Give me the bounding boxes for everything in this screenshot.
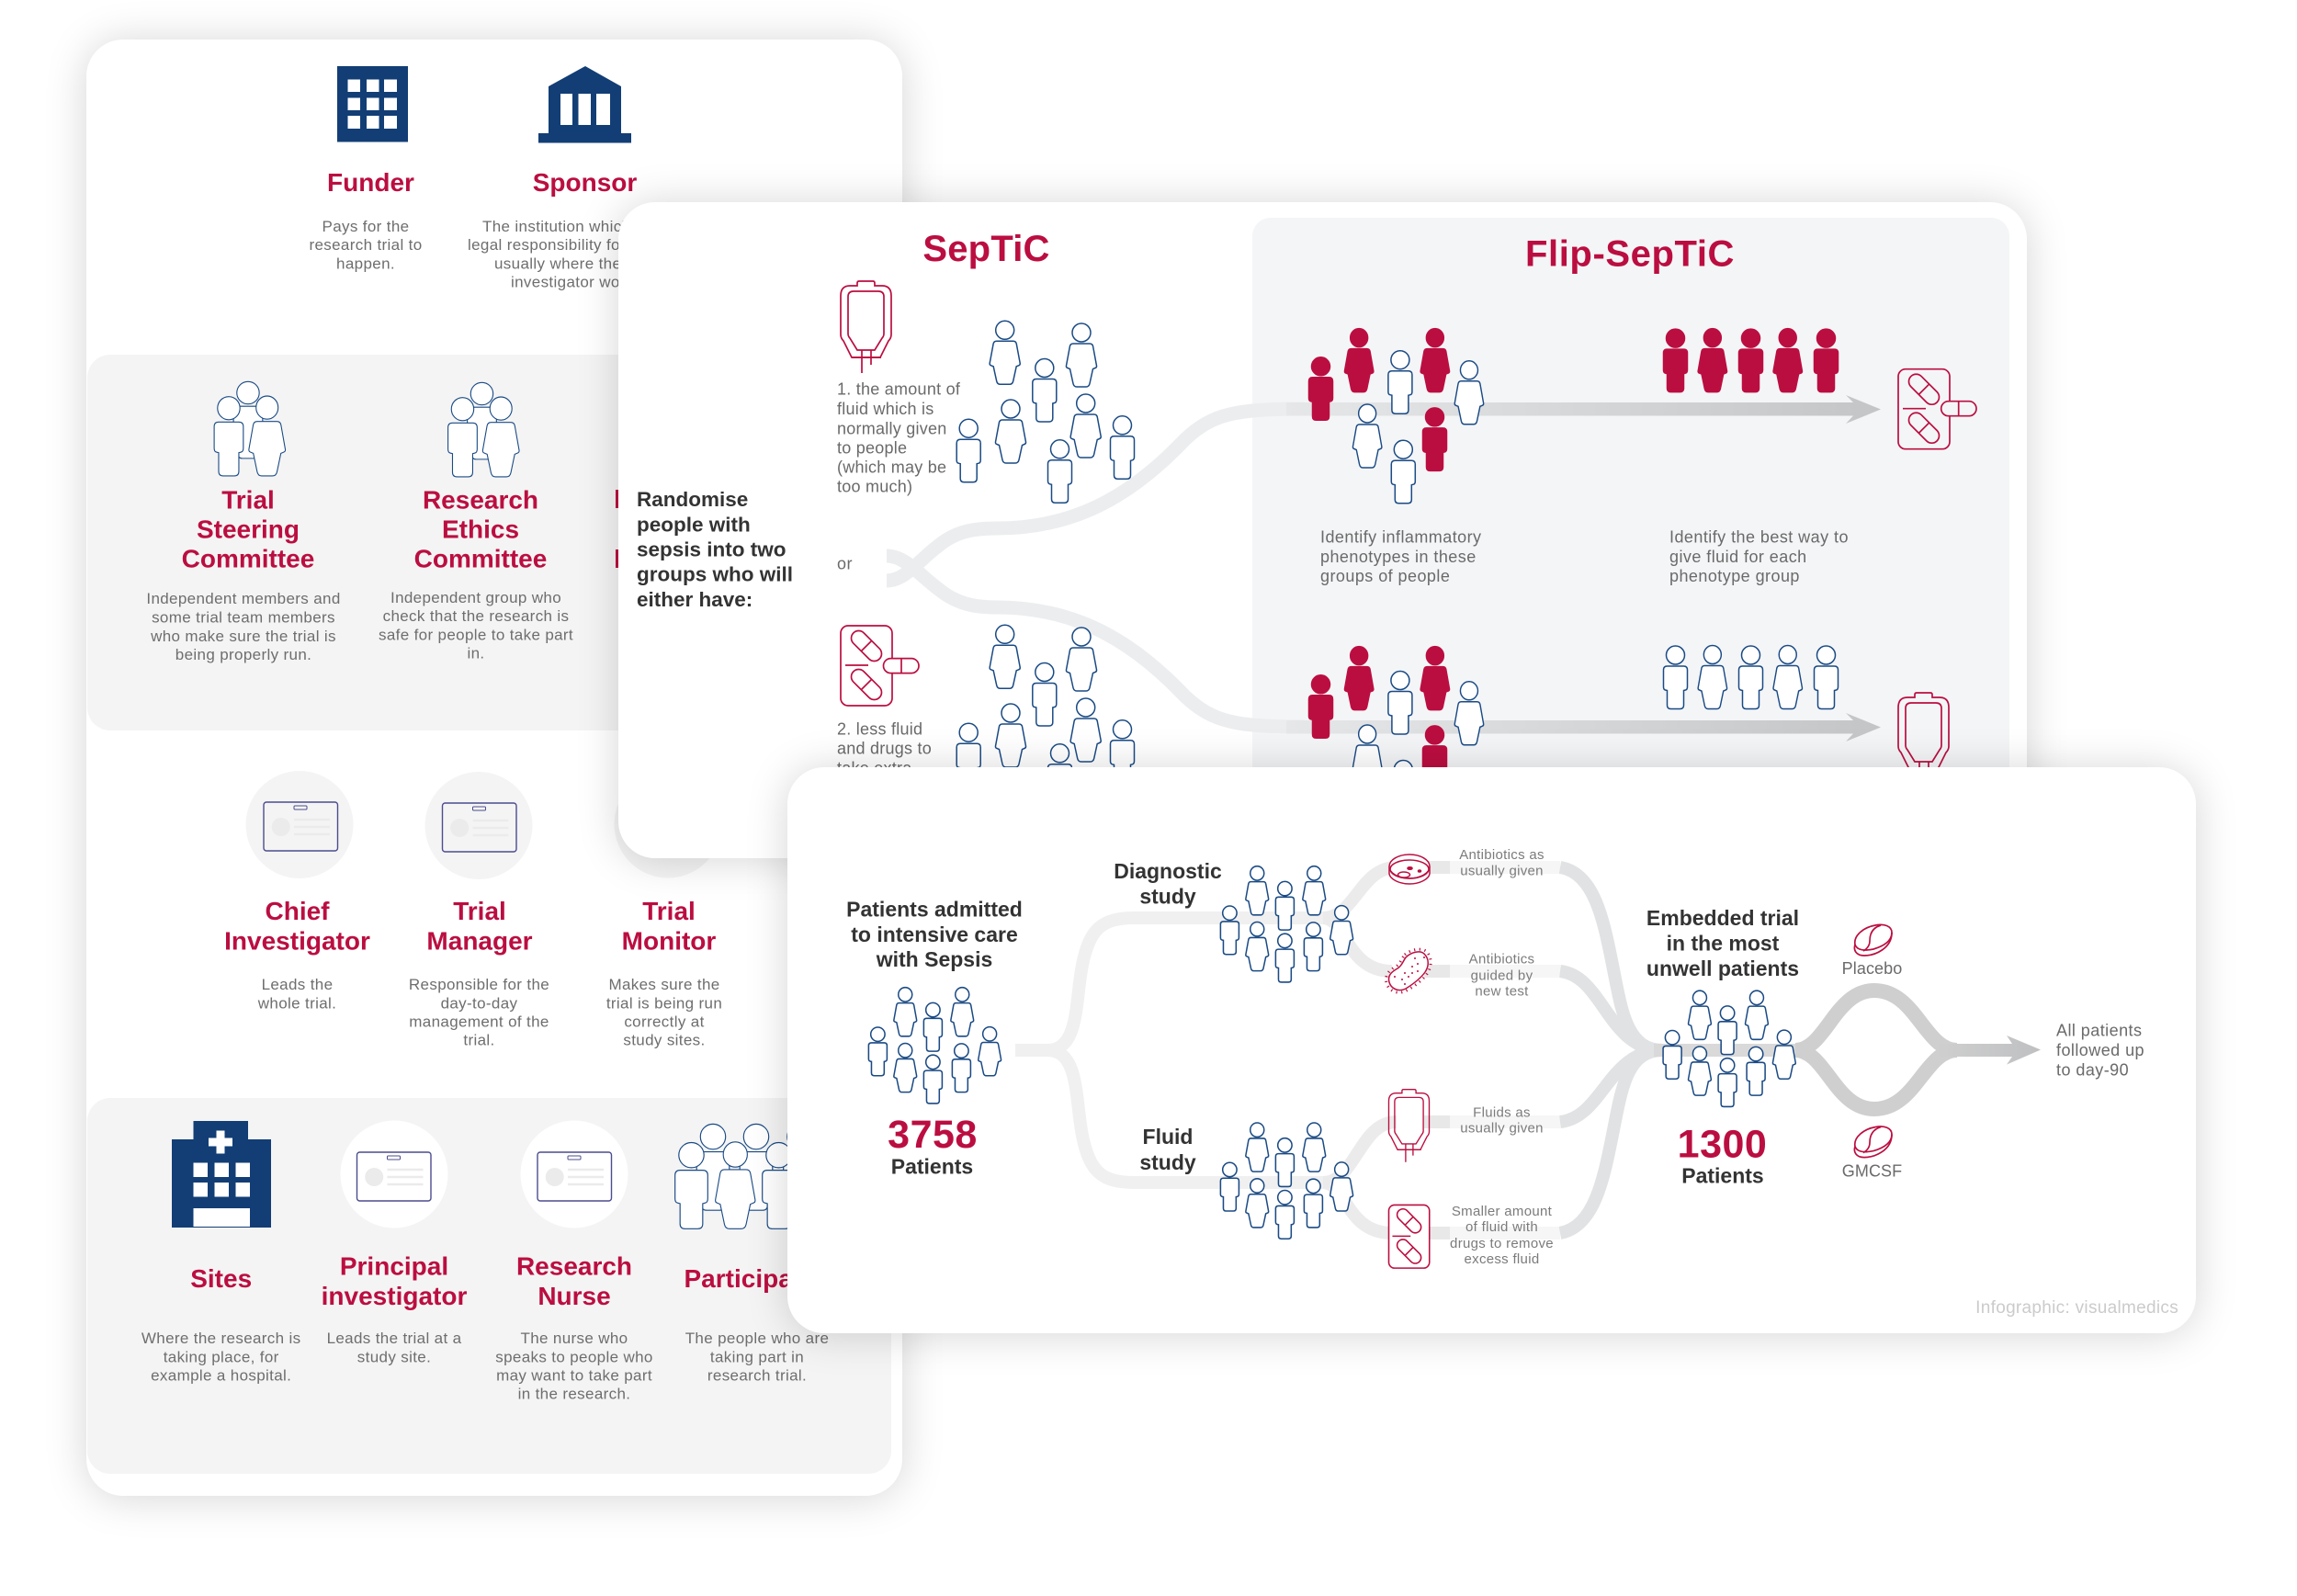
heading: chief investigator: Investigator [224, 926, 370, 956]
heading: sites: Sites [190, 1264, 252, 1293]
icon: placebo tablet [1854, 924, 1892, 956]
heading: participants: Participants [684, 1264, 832, 1293]
text: placebo: Placebo [1842, 959, 1902, 978]
heading: SepTiC: SepTiC [922, 229, 1050, 269]
text: or: or [837, 555, 853, 573]
text: funder description: happen. [336, 255, 395, 272]
text: option two: take extra [837, 759, 912, 777]
text: funder description: research trial to [309, 236, 423, 254]
heading: trial steering committee: Steering [197, 515, 300, 544]
icon: bacterium [1386, 949, 1431, 992]
text: sites description: example a hospital. [151, 1367, 291, 1384]
text: research nurse description: The nurse who [520, 1330, 628, 1347]
heading: fluid study: study [1139, 1150, 1196, 1174]
text: identify phenotypes: Identify inflammatory [1320, 527, 1482, 546]
text: research nurse description: in the research. [518, 1386, 630, 1402]
chart: fluid study group [1220, 1123, 1353, 1239]
heading: patients admitted: with Sepsis [876, 947, 992, 971]
icon: trial monitor circle [614, 770, 722, 878]
text: identify best fluid: phenotype group [1669, 567, 1800, 585]
heading: research ethics committee: Research [423, 485, 538, 515]
panel: SepTiC card [618, 202, 2027, 858]
arrow: upper phenotype arrow [1286, 395, 1881, 424]
heading: diagnostic study: study [1139, 884, 1196, 908]
text: randomise instruction: Randomise [637, 488, 748, 511]
heading: trial manager: Trial [453, 897, 506, 925]
diagram: label strips [1424, 861, 1560, 1239]
diagram: branching streams [887, 409, 1305, 727]
icon: small fluid bag [1389, 1090, 1430, 1162]
text: fluids as usually given: Fluids as [1473, 1104, 1531, 1121]
text: embedded patients: Patients [1681, 1163, 1764, 1187]
diagram: initial split streams [1015, 918, 1328, 1183]
text: smaller amount of fluid: drugs to remove [1450, 1236, 1554, 1251]
heading: trial monitor: Trial [642, 897, 696, 925]
text: funder description: Pays for the [322, 218, 409, 235]
heading: funder: Funder [327, 168, 414, 197]
text: smaller amount of fluid: excess fluid [1465, 1251, 1539, 1267]
chart: SepTiC people group two [956, 625, 1134, 807]
heading: Flip-SepTiC: Flip-SepTiC [1525, 233, 1735, 274]
text: GMCSF: GMCSF [1842, 1161, 1902, 1180]
icon: funder building [337, 66, 408, 141]
text: research ethics committee description: safe for people to take part [379, 627, 573, 643]
text: trial monitor description: trial is being run [606, 994, 722, 1013]
text: antibiotics as usually given: Antibiotics as [1459, 847, 1545, 863]
text: smaller amount of fluid: of fluid with [1465, 1219, 1538, 1235]
icon: hospital site [172, 1121, 271, 1228]
text: antibiotics guided by new test: guided by [1471, 968, 1533, 983]
chart: blue phenotype row [1663, 645, 1838, 709]
text: research nurse description: speaks to people who [495, 1349, 653, 1365]
text: principal investigator description: Leads the trial at a [327, 1330, 462, 1347]
icon: drug pack with capsule [841, 626, 919, 706]
chart: inflammatory phenotype group one [1308, 329, 1484, 504]
heading: trial monitor: Monitor [622, 926, 716, 956]
icon: drug pack target [1898, 369, 1976, 449]
text: research ethics committee description: check that the research is [383, 607, 569, 625]
arrow: lower phenotype arrow [1286, 713, 1881, 741]
heading: sponsor: Sponsor [533, 168, 637, 197]
text: antibiotics guided by new test: new test [1475, 983, 1529, 1000]
heading: trial steering committee: Trial [221, 485, 275, 515]
icon: small drug pack [1389, 1205, 1430, 1268]
text: trial steering committee description: being properly run. [175, 646, 311, 663]
heading: embedded trial: in the most [1667, 932, 1780, 956]
text: credit: Infographic: visualmedics [1975, 1298, 2178, 1318]
text: randomise instruction: either have: [637, 588, 752, 611]
text: option one: too much) [837, 478, 912, 496]
panel: committees background [87, 355, 896, 730]
text: randomise instruction: sepsis into two [637, 538, 786, 560]
text: identify phenotypes: phenotypes in these [1320, 548, 1477, 566]
text: option two: and drugs to [837, 739, 932, 757]
text: identify best fluid: give fluid for each [1669, 548, 1807, 566]
heading: diagnostic study: Diagnostic [1114, 859, 1222, 883]
heading: embedded trial: Embedded trial [1646, 906, 1799, 930]
chart: red phenotype row [1663, 329, 1838, 392]
chart: admitted patients group [868, 988, 1001, 1104]
text: option one: 1. the amount of [837, 380, 961, 399]
panel: sites background [87, 1098, 891, 1474]
text: fluids as usually given: usually given [1460, 1121, 1544, 1136]
icon: fluid bag target [1898, 693, 1949, 785]
heading: research nurse: Nurse [537, 1282, 611, 1310]
number: 3758: 3758 [888, 1113, 978, 1157]
icon: trial steering committee people [214, 381, 286, 476]
text: option one: (which may be [837, 458, 946, 476]
icon: research ethics committee people [448, 382, 519, 477]
icon: sponsor institution [538, 66, 631, 143]
diagram: study branch streams [1323, 867, 1397, 1233]
heading: patients admitted: Patients admitted [846, 897, 1023, 921]
text: trial monitor description: Makes sure the [608, 976, 720, 993]
text: antibiotics as usually given: usually given [1460, 864, 1544, 878]
text: chief investigator description: Leads the [262, 976, 333, 993]
heading: patients admitted: to intensive care [851, 923, 1018, 946]
icon: research nurse badge [520, 1121, 628, 1228]
chart: embedded trial group [1663, 990, 1795, 1106]
chart: inflammatory phenotype group two [1308, 647, 1484, 823]
heading: trial manager: Manager [426, 926, 533, 956]
chart: diagnostic study group [1220, 866, 1353, 982]
heading: fluid study: Fluid [1143, 1125, 1193, 1149]
text: research nurse description: may want to take part [496, 1367, 652, 1384]
text: trial manager description: Responsible for the [409, 976, 549, 993]
icon: fluid bag [841, 281, 891, 373]
text: option one: to people [837, 439, 907, 458]
text: all patients followed up: to day-90 [2056, 1060, 2129, 1079]
text: trial manager description: management of the [409, 1013, 549, 1031]
heading: trial steering committee: Committee [182, 544, 314, 573]
text: trial steering committee description: who make sure the trial is [150, 628, 336, 645]
diagram: merging streams [1560, 867, 1805, 1233]
text: sites description: Where the research is [141, 1330, 301, 1347]
text: sites description: taking place, for [164, 1349, 279, 1365]
text: principal investigator description: study site. [357, 1349, 431, 1365]
text: all patients followed up: All patients [2056, 1022, 2142, 1040]
chart: SepTiC people group one [956, 321, 1134, 503]
heading: research ethics committee: Committee [414, 544, 547, 573]
icon: principal investigator badge [340, 1121, 448, 1228]
panel: Flip-SepTiC background [1252, 218, 2009, 843]
text: participants description: research trial. [707, 1367, 807, 1384]
heading: research nurse: Research [516, 1251, 632, 1281]
text: trial manager description: trial. [463, 1031, 495, 1049]
text: participants description: The people who are [685, 1330, 829, 1347]
text: chief investigator description: whole trial. [257, 994, 336, 1013]
arrow: follow up arrow [1939, 1036, 2041, 1065]
text: trial monitor description: correctly at [624, 1013, 705, 1031]
text: smaller amount of fluid: Smaller amount [1452, 1204, 1553, 1219]
text: sponsor description: The institution which has the [482, 218, 689, 235]
text: research ethics committee description: in. [467, 645, 485, 662]
icon: petri dish [1389, 855, 1430, 884]
text: sponsor description: usually where the chief [494, 255, 661, 272]
text: sponsor description: investigator works. [511, 274, 646, 290]
icon: chief investigator badge [246, 771, 353, 878]
diagram: placebo and GMCSF streams [1795, 990, 1957, 1109]
text: sponsor description: legal responsibility for the trial, [468, 236, 689, 254]
text: option two: 2. less fluid [837, 720, 922, 739]
panel: trial roles card [86, 40, 902, 1496]
heading: chief investigator: Chief [265, 897, 330, 925]
text: trial steering committee description: Independent members and [146, 590, 341, 607]
text: identify phenotypes: groups of people [1320, 567, 1450, 585]
text: trial steering committee description: some trial team members [152, 608, 335, 627]
text: research ethics committee description: Independent group who [390, 589, 561, 606]
text: all patients followed up: followed up [2056, 1041, 2144, 1059]
panel: embedded trial card [787, 767, 2196, 1333]
text: participants description: taking part in [710, 1349, 804, 1365]
text: trial manager description: day-to-day [441, 994, 518, 1013]
heading: embedded trial: unwell patients [1646, 956, 1799, 980]
heading: research ethics committee: Ethics [442, 515, 519, 544]
text: antibiotics guided by new test: Antibiotics [1469, 952, 1534, 967]
text: randomise instruction: people with [637, 513, 751, 537]
text: randomise instruction: groups who will [637, 562, 793, 586]
heading: principal investigator: investigator [322, 1282, 467, 1310]
number: 1300: 1300 [1678, 1123, 1767, 1167]
icon: GMCSF tablet [1854, 1126, 1892, 1158]
text: patients: Patients [891, 1154, 973, 1178]
heading: principal investigator: Principal [340, 1251, 448, 1281]
icon: trial manager badge [424, 772, 533, 879]
text: identify best fluid: Identify the best way to [1669, 527, 1849, 546]
text: trial monitor description: study sites. [623, 1031, 706, 1049]
text: option one: fluid which is [837, 400, 934, 418]
icon: participants group [675, 1124, 816, 1228]
text: option one: normally given [837, 419, 947, 437]
heading: third committee fragments [616, 490, 619, 568]
